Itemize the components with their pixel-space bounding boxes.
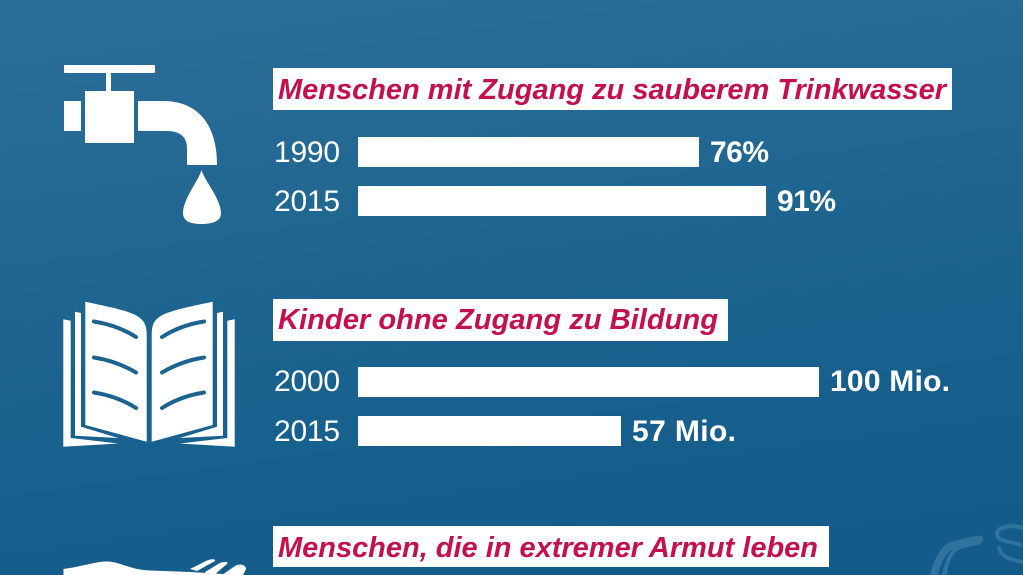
bar row: 2015: 91% (777, 185, 836, 218)
panel: drinking water (273, 68, 952, 218)
icon: hand (64, 559, 246, 575)
icon: open book (63, 302, 235, 447)
bar row: 2015: 2015 (274, 415, 340, 448)
bar row: 1990 (274, 136, 769, 169)
bar row: 1990: 76% (710, 136, 769, 169)
icon: water tap with drop (64, 65, 221, 224)
heading: drinking water: Menschen mit Zugang zu sauberem Trinkwasser (278, 74, 948, 106)
panel: extreme poverty heading: Menschen, die in extremer Armut leben (278, 532, 818, 564)
watermark: federal eagle (930, 526, 1023, 575)
bar row: 2015: 2015 (274, 185, 340, 218)
heading: education: Kinder ohne Zugang zu Bildung (278, 304, 718, 336)
bar row: 2000 (274, 365, 950, 398)
bar row: 2015 (274, 185, 836, 218)
bar row: 2000: 100 Mio. (830, 365, 950, 398)
bar row: 2000: 2000 (274, 365, 340, 398)
bar row: 2015: 57 Mio. (632, 415, 736, 448)
bar row: 1990: 1990 (274, 136, 340, 169)
panel: education (273, 299, 950, 448)
bar row: 2015 (274, 415, 736, 448)
